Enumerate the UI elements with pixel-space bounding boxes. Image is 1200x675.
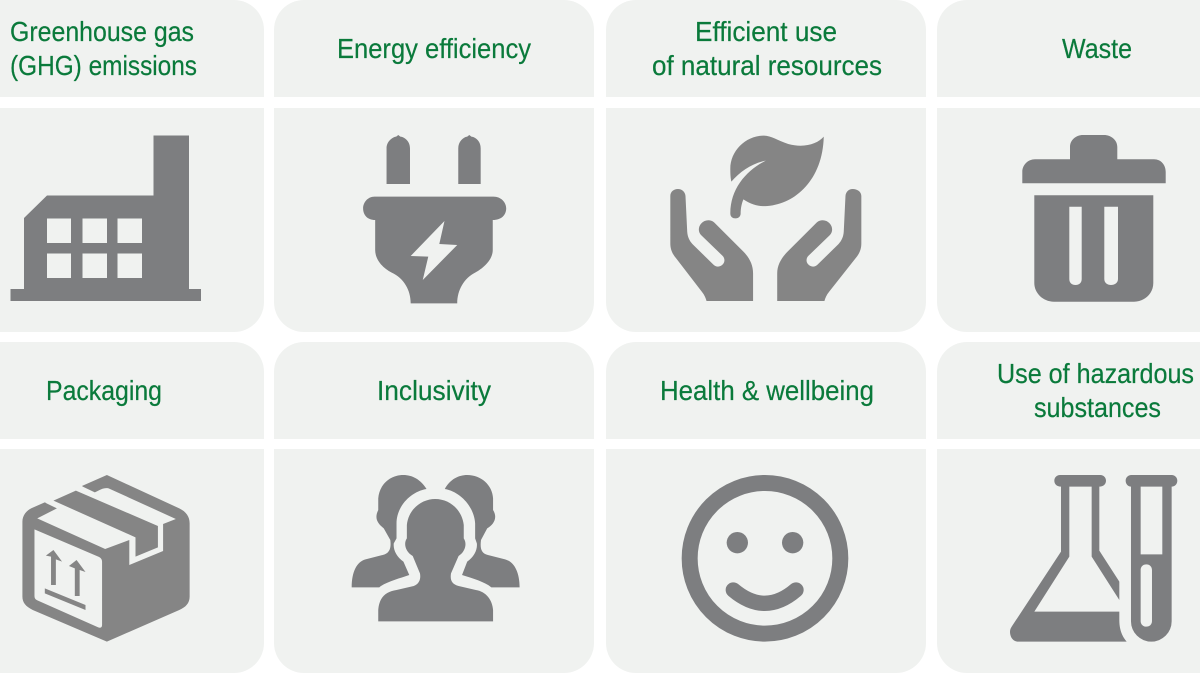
icon: group of three people — [352, 475, 520, 621]
icon: hands holding a leaf — [670, 136, 861, 301]
icon: flask and test tube — [1010, 475, 1177, 642]
icon: factory — [10, 136, 201, 301]
panel: Use of hazardous substances — [937, 342, 1200, 673]
heading: Efficient use of natural resources: Efficient use — [695, 16, 837, 47]
icon: smiley face — [690, 483, 840, 634]
heading: Use of hazardous substances — [997, 358, 1194, 423]
panel: Packaging — [0, 342, 264, 673]
heading: Greenhouse gas emissions: Greenhouse gas — [10, 16, 194, 47]
panel: Health and wellbeing — [606, 342, 926, 673]
heading: Efficient use of natural resources — [652, 16, 882, 81]
heading: Greenhouse gas emissions: (GHG) emissions — [10, 50, 197, 81]
panel: Energy efficiency — [274, 0, 594, 332]
icon: cardboard box with up arrows — [22, 475, 190, 642]
heading: Greenhouse gas emissions — [10, 16, 197, 81]
heading: Energy efficiency: Energy efficiency — [337, 33, 531, 64]
heading: Waste: Waste — [1062, 33, 1132, 64]
icon: trash can — [1022, 135, 1166, 302]
panel: Greenhouse gas emissions — [0, 0, 264, 332]
heading: Packaging: Packaging — [46, 375, 162, 406]
heading: Health & wellbeing: Health & wellbeing — [660, 375, 874, 406]
heading: Efficient use of natural resources: of natural resources — [652, 50, 882, 81]
icon: plug with lightning bolt — [363, 135, 506, 303]
panel: Inclusivity — [274, 342, 594, 673]
panel: Efficient use of natural resources — [606, 0, 926, 332]
heading: Inclusivity: Inclusivity — [377, 375, 491, 406]
panel: Waste — [937, 0, 1200, 332]
heading: Use of hazardous substances: substances — [1034, 392, 1161, 423]
